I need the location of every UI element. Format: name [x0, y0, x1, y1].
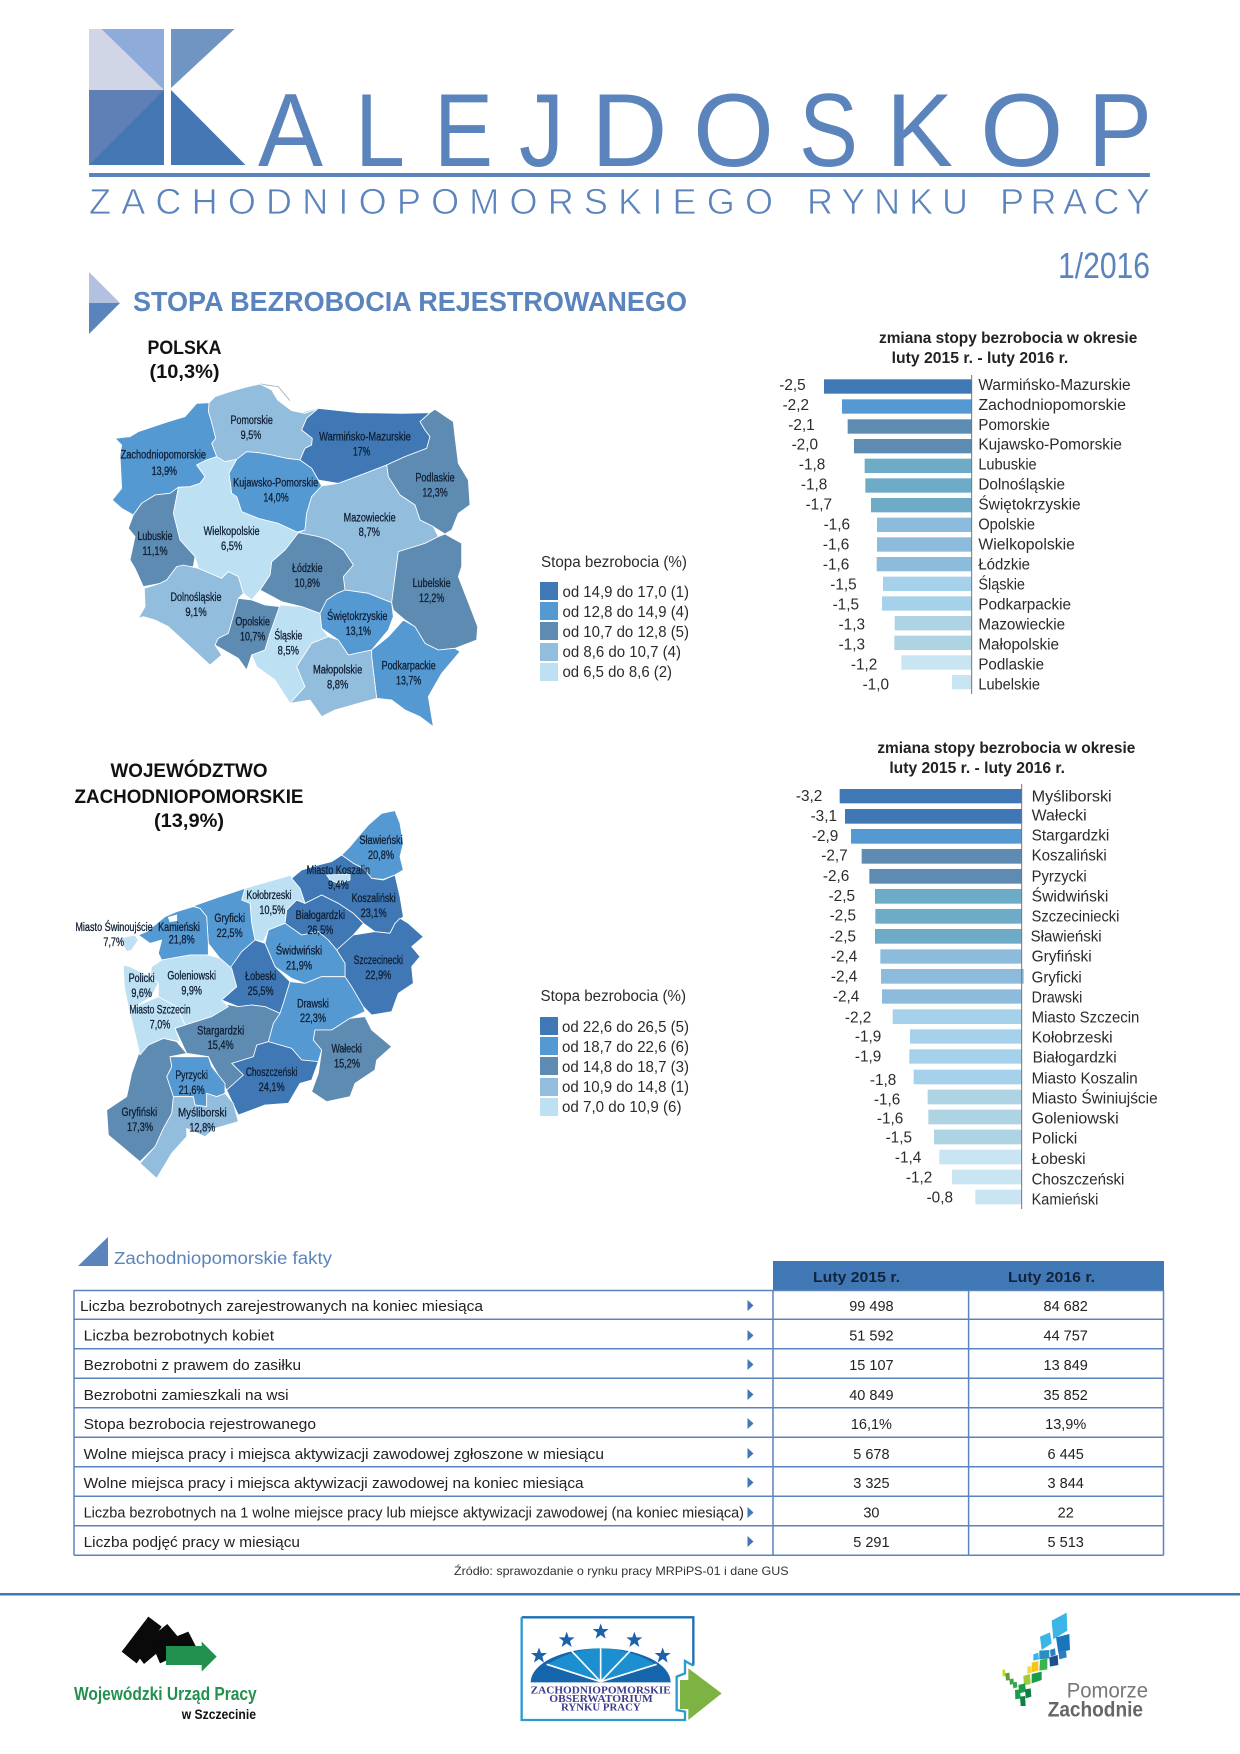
table header: Luty 2016 r.	[1008, 1270, 1095, 1286]
county labels: Kamieński	[158, 920, 200, 934]
logo: Wojewódzki Urząd Pracy: w Szczecinie	[181, 1706, 256, 1722]
icon: mosaic check mark	[1002, 1613, 1070, 1706]
legend: Poland unemployment rate: Stopa bezrobocia (%)	[541, 554, 687, 571]
title: ALEJDOSKOP letters: L	[355, 73, 405, 189]
region labels: Śląskie	[274, 627, 302, 642]
bars and values: -1,5	[833, 597, 859, 614]
axis line	[970, 375, 973, 694]
bars and values: -1,6	[823, 537, 849, 554]
row: jobs taken up: 5 513	[1048, 1535, 1084, 1551]
county labels: 23,1%	[361, 906, 387, 920]
heading: Polska	[148, 337, 222, 383]
bar chart: change by voivodeship	[779, 330, 1137, 694]
title: ALEJDOSKOP letters: P	[1088, 73, 1152, 189]
title rule	[89, 173, 1150, 177]
bars and values: Goleniowski	[1032, 1110, 1119, 1127]
region labels: Zachodniopomorskie	[121, 447, 206, 461]
bars and values: -1,6	[874, 1091, 900, 1108]
bars and values: Śląskie	[978, 576, 1025, 594]
bars and values: -2,0	[792, 437, 818, 454]
bars and values: Lubuskie	[978, 457, 1037, 474]
legend: county unemployment rate: od 7,0 do 10,9 (6)	[562, 1099, 682, 1116]
bars and values: -2,4	[831, 969, 858, 986]
region labels: 6,5%	[221, 539, 242, 553]
bars and values: -0,8	[927, 1190, 953, 1207]
bars and values: Warmińsko-Mazurskie	[978, 377, 1131, 394]
county labels: Kołobrzeski	[246, 888, 291, 902]
region labels: 10,7%	[240, 630, 265, 644]
county labels: 7,0%	[150, 1017, 170, 1031]
bars and values: Myśliborski	[1032, 789, 1112, 806]
bars and values: Dolnośląskie	[978, 477, 1065, 494]
legend: county unemployment rate	[540, 988, 689, 1116]
county labels: Szczecinecki	[354, 953, 403, 967]
region labels: 9,5%	[241, 428, 261, 442]
title: ALEJDOSKOP letters: A	[258, 73, 324, 189]
logo text: RYNKU PRACY	[561, 1702, 641, 1714]
bars and values: Podkarpackie	[978, 597, 1071, 614]
county labels: Stargardzki	[197, 1023, 244, 1037]
bars and values: Kujawsko-Pomorskie	[978, 437, 1122, 454]
county labels: 15,4%	[208, 1038, 234, 1052]
county labels: 25,5%	[248, 984, 274, 998]
county labels: Goleniowski	[167, 968, 216, 982]
county labels: Miasto Świnoujście	[75, 919, 153, 934]
row: registered unemployed: 99 498	[849, 1299, 894, 1315]
regions	[112, 384, 478, 727]
row: unemployed per vacancy	[84, 1506, 1074, 1522]
icon: observatory emblem	[522, 1617, 722, 1720]
bars and values: Miasto Koszalin	[1032, 1070, 1138, 1087]
row: registered unemployed	[80, 1299, 1088, 1315]
icon: triangle	[78, 1237, 108, 1266]
row: unemployed per vacancy: 22	[1058, 1506, 1074, 1522]
logo text: Wojewódzki Urząd Pracy	[74, 1684, 257, 1704]
legend: Poland unemployment rate	[540, 554, 689, 681]
logo text: Pomorze	[1067, 1680, 1148, 1703]
bars and values: -2,5	[829, 888, 855, 905]
row: vacancies reported: 6 445	[1048, 1447, 1084, 1463]
row: vacancies reported	[84, 1447, 1084, 1463]
map: Poland voivodeships	[112, 384, 478, 727]
bars and values: Stargardzki	[1032, 828, 1109, 845]
region labels: Łódzkie	[292, 561, 323, 575]
bars and values: Łódzkie	[978, 557, 1030, 574]
table header: Luty 2015 r.	[813, 1270, 900, 1286]
county labels: Choszczeński	[246, 1065, 297, 1079]
county labels: Myśliborski	[178, 1106, 227, 1120]
bars and values: -2,2	[783, 397, 809, 414]
bars and values: Świdwiński	[1032, 888, 1108, 906]
region labels: Podlaskie	[415, 470, 455, 484]
row: registered unemployment rate: 13,9%	[1045, 1417, 1086, 1433]
heading: Polska: (10,3%)	[150, 361, 220, 383]
icon: heading triangles	[89, 272, 120, 334]
county labels: Sławieński	[359, 833, 403, 847]
row: vacancies reported: 5 678	[853, 1447, 890, 1463]
legend: county unemployment rate: Stopa bezrobocia (%)	[540, 988, 686, 1005]
row: with benefit rights: 13 849	[1044, 1358, 1088, 1374]
region labels: 12,2%	[419, 591, 444, 605]
region labels: 10,8%	[295, 576, 320, 590]
county labels: Wałecki	[331, 1041, 362, 1055]
county labels: 21,9%	[286, 959, 312, 973]
region labels	[121, 413, 455, 691]
bars and values: -2,5	[830, 929, 856, 946]
row: registered unemployment rate: Stopa bezrobocia rejestrowanego	[84, 1417, 316, 1433]
county labels: 7,7%	[103, 935, 124, 949]
title: ALEJDOSKOP letters: S	[799, 73, 858, 189]
county labels: 17,3%	[127, 1120, 153, 1134]
bars and values: Choszczeński	[1032, 1171, 1124, 1188]
title: ALEJDOSKOP letters	[258, 73, 1152, 189]
bars and values: Policki	[1032, 1130, 1077, 1147]
region labels: Świętokrzyskie	[327, 608, 388, 623]
county labels: Białogardzki	[296, 908, 345, 922]
region labels: 14,0%	[263, 490, 289, 504]
bars and values: -3,2	[796, 788, 822, 805]
region labels: 13,7%	[396, 673, 421, 687]
county labels: 26,5%	[307, 923, 333, 937]
legend: county unemployment rate: od 10,9 do 14,8 (1)	[562, 1079, 689, 1096]
bars and values: Małopolskie	[978, 637, 1059, 654]
logo: Pomorze Zachodnie	[1002, 1613, 1148, 1722]
heading: Województwo zachodniopomorskie: WOJEWÓDZTWO	[110, 760, 268, 782]
region labels: 8,7%	[359, 525, 380, 539]
county labels: 22,3%	[300, 1011, 326, 1025]
bars and values: -2,6	[823, 868, 849, 885]
county labels: 21,6%	[179, 1083, 205, 1097]
county labels	[75, 833, 403, 1135]
bars and values: -1,9	[855, 1029, 881, 1046]
title: ALEJDOSKOP letters: J	[519, 73, 564, 189]
bars and values: Podlaskie	[978, 657, 1044, 674]
icon: black cards with green arrow	[122, 1617, 217, 1672]
chart title	[877, 740, 1135, 777]
bars and values: -1,3	[839, 617, 865, 634]
row: living in rural areas: 40 849	[849, 1388, 894, 1404]
region labels: Podkarpackie	[382, 658, 436, 672]
legend: county unemployment rate: od 18,7 do 22,6 (6)	[562, 1039, 689, 1056]
legend: Poland unemployment rate: od 8,6 do 10,7 (4)	[562, 644, 681, 661]
row: unemployed women: Liczba bezrobotnych kobiet	[84, 1328, 274, 1344]
region labels: Opolskie	[235, 615, 270, 629]
chart title: luty 2015 r. - luty 2016 r.	[889, 760, 1065, 777]
bars and values: Białogardzki	[1033, 1050, 1117, 1067]
icon: kaleidoscope K tiles	[89, 29, 246, 165]
bars and values: -2,9	[812, 828, 838, 845]
region labels: 12,3%	[422, 485, 448, 499]
bars and values: Świętokrzyskie	[978, 496, 1081, 514]
logo: Wojewódzki Urząd Pracy	[74, 1617, 257, 1722]
legend: county unemployment rate: od 22,6 do 26,5 (5)	[562, 1019, 689, 1036]
bars and values: Pomorskie	[978, 417, 1050, 434]
region labels: Lubelskie	[413, 576, 451, 590]
bars and values: -1,9	[855, 1049, 881, 1066]
bars and values: -3,1	[811, 808, 837, 825]
title: ALEJDOSKOP letters: O	[980, 73, 1064, 189]
county labels: Koszaliński	[352, 891, 396, 905]
row: unemployed women	[84, 1328, 1088, 1344]
bars and values: -1,2	[851, 657, 877, 674]
county labels: 15,2%	[334, 1056, 360, 1070]
region labels: 9,1%	[185, 605, 207, 619]
county labels: 22,5%	[217, 926, 243, 940]
row: vacancies at month end	[84, 1476, 1084, 1492]
bars and values: Łobeski	[1032, 1151, 1086, 1168]
heading: Polska: POLSKA	[148, 337, 222, 359]
bars and values: -2,2	[845, 1009, 871, 1026]
logo: Pomorze Zachodnie: Zachodnie	[1048, 1699, 1143, 1722]
bars and values: Drawski	[1032, 990, 1082, 1007]
bars and values: -1,6	[824, 517, 850, 534]
row: registered unemployed: 84 682	[1044, 1299, 1088, 1315]
county labels: Policki	[129, 971, 155, 985]
county labels: 21,8%	[169, 932, 195, 946]
bars and values: -1,6	[877, 1110, 903, 1127]
row: jobs taken up	[84, 1535, 1084, 1551]
legend: county unemployment rate: od 14,8 do 18,7 (3)	[562, 1059, 689, 1076]
logo text: ZACHODNIOPOMORSKIE	[531, 1684, 671, 1696]
county labels: 9,6%	[131, 986, 152, 1000]
region labels: 8,5%	[278, 643, 299, 657]
region labels: Warmińsko-Mazurskie	[319, 430, 411, 444]
row: vacancies reported: Wolne miejsca pracy i miejsca aktywizacji zawodowej zgłoszone w miesiącu	[84, 1447, 604, 1463]
bars and values: -1,8	[870, 1072, 896, 1089]
bars and values: Sławieński	[1031, 929, 1102, 946]
bars and values: Zachodniopomorskie	[978, 397, 1126, 414]
region labels: Kujawsko-Pomorskie	[233, 476, 318, 490]
row: unemployed per vacancy: Liczba bezrobotnych na 1 wolne miejsce pracy lub miejsce aktywizacji zawodowej (na koniec miesiąca)	[84, 1506, 744, 1522]
county labels: Pyrzycki	[175, 1068, 208, 1082]
section heading with triangle icon	[89, 272, 687, 334]
bars and values: Szczeciniecki	[1032, 909, 1119, 926]
county labels: 9,4%	[328, 878, 349, 892]
region labels: Małopolskie	[313, 662, 362, 676]
bars and values: Mazowieckie	[978, 617, 1065, 634]
facts heading with triangle icon	[78, 1237, 332, 1268]
masthead: Kalejdoskop logo and title	[89, 29, 1152, 222]
bars and values: Kamieński	[1032, 1191, 1098, 1208]
region labels: 17%	[353, 445, 370, 459]
logo text	[531, 1684, 671, 1714]
bars and values: Wałecki	[1032, 808, 1087, 825]
bars and values: -1,5	[830, 577, 857, 594]
row: unemployed women: 44 757	[1044, 1328, 1088, 1344]
chart title: luty 2015 r. - luty 2016 r.	[892, 350, 1068, 367]
row: living in rural areas: Bezrobotni zamieszkali na wsi	[84, 1388, 289, 1404]
row: unemployed per vacancy: 30	[863, 1506, 879, 1522]
bars and values	[779, 377, 1131, 694]
title: ALEJDOSKOP letters: D	[591, 73, 668, 189]
bars and values: Kołobrzeski	[1032, 1029, 1113, 1046]
bars and values: Lubelskie	[978, 677, 1040, 694]
row: with benefit rights: Bezrobotni z prawem do zasiłku	[84, 1358, 301, 1374]
county labels: 12,8%	[189, 1121, 215, 1135]
subtitle: RYNKU	[807, 181, 968, 222]
row: vacancies at month end: 3 325	[853, 1476, 890, 1492]
bars and values	[796, 788, 1158, 1208]
row: registered unemployed: Liczba bezrobotnych zarejestrowanych na koniec miesiąca	[80, 1299, 484, 1315]
region labels: Lubuskie	[137, 529, 173, 543]
subtitle	[89, 181, 1150, 222]
chart title	[879, 330, 1137, 367]
county labels: 22,9%	[365, 968, 391, 982]
footer rule	[0, 1593, 1240, 1596]
row: living in rural areas	[84, 1388, 1088, 1404]
row: with benefit rights	[84, 1358, 1088, 1374]
heading: Województwo zachodniopomorskie	[74, 760, 304, 832]
bars and values: -1,7	[806, 497, 832, 514]
county labels: Gryfiński	[121, 1105, 157, 1119]
county labels: Łobeski	[245, 969, 276, 983]
table header	[773, 1261, 1164, 1291]
axis line	[1020, 784, 1023, 1209]
region labels: Wielkopolskie	[204, 524, 260, 538]
facts heading text: Zachodniopomorskie fakty	[114, 1248, 332, 1268]
bars and values: Miasto Świniujście	[1032, 1089, 1158, 1107]
source note: Źródło: sprawozdanie o rynku pracy MRPiPS-01 i dane GUS	[454, 1563, 789, 1578]
region labels: Mazowieckie	[344, 510, 396, 524]
regions	[107, 811, 423, 1178]
legend: Poland unemployment rate: od 10,7 do 12,8 (5)	[562, 624, 689, 641]
bars and values: Opolskie	[978, 517, 1035, 534]
row: unemployed women: 51 592	[849, 1328, 894, 1344]
county labels: Drawski	[297, 996, 329, 1010]
bars and values: -2,5	[830, 908, 856, 925]
region labels: Pomorskie	[230, 413, 273, 427]
region labels: 13,9%	[152, 464, 177, 478]
county labels: Gryficki	[214, 911, 245, 925]
county labels: 10,5%	[259, 903, 285, 917]
row: living in rural areas: 35 852	[1044, 1388, 1088, 1404]
chart title: zmiana stopy bezrobocia w okresie	[879, 330, 1137, 347]
heading: Województwo zachodniopomorskie: (13,9%)	[154, 811, 224, 832]
legend: Poland unemployment rate: od 12,8 do 14,9 (4)	[562, 604, 689, 621]
legend: Poland unemployment rate: od 6,5 do 8,6 (2)	[562, 664, 672, 681]
bar chart: change by county	[796, 740, 1158, 1209]
issue number: 1/2016	[1058, 245, 1150, 286]
heading text: STOPA BEZROBOCIA REJESTROWANEGO	[133, 286, 687, 317]
bars and values: -1,6	[823, 557, 849, 574]
title: ALEJDOSKOP letters: K	[886, 73, 953, 189]
row: vacancies at month end: Wolne miejsca pracy i miejsca aktywizacji zawodowej na koniec miesiąca	[84, 1476, 585, 1492]
bars and values: -1,8	[799, 457, 825, 474]
row: vacancies at month end: 3 844	[1048, 1476, 1084, 1492]
map: West Pomeranian counties	[75, 811, 423, 1178]
subtitle: ZACHODNIOPOMORSKIEGO	[89, 181, 773, 222]
row: with benefit rights: 15 107	[849, 1358, 894, 1374]
bars and values: Koszaliński	[1032, 848, 1107, 865]
row: registered unemployment rate: 16,1%	[851, 1417, 892, 1433]
bars and values: -2,1	[788, 417, 815, 434]
bars and values: -2,4	[833, 989, 860, 1006]
chart title: zmiana stopy bezrobocia w okresie	[877, 740, 1135, 757]
bars and values: -2,7	[821, 848, 848, 865]
table: facts	[74, 1261, 1164, 1555]
bars and values: Pyrzycki	[1032, 869, 1087, 886]
county labels: 9,9%	[181, 983, 202, 997]
bars and values: -2,4	[831, 949, 858, 966]
bars and values: -1,3	[839, 637, 865, 654]
region labels: 8,8%	[327, 677, 348, 691]
heading: Województwo zachodniopomorskie: ZACHODNIOPOMORSKIE	[74, 787, 304, 808]
table grid	[74, 1290, 1164, 1555]
county labels: Miasto Koszalin	[307, 863, 370, 877]
row: jobs taken up: 5 291	[853, 1535, 890, 1551]
county labels: Świdwiński	[276, 943, 322, 958]
row: registered unemployment rate	[84, 1417, 1086, 1433]
region labels: Dolnośląskie	[170, 590, 222, 604]
county labels: 24,1%	[259, 1080, 285, 1094]
bars and values: -1,4	[895, 1150, 922, 1167]
bars and values: -2,5	[779, 377, 806, 394]
bars and values: -1,8	[801, 477, 827, 494]
logo text: OBSERWATORIUM	[549, 1693, 653, 1705]
bars and values: Miasto Szczecin	[1032, 1010, 1139, 1027]
region labels: 13,1%	[346, 624, 371, 638]
county labels: Miasto Szczecin	[129, 1002, 191, 1016]
bars and values: -1,0	[863, 677, 889, 694]
legend: Poland unemployment rate: od 14,9 do 17,0 (1)	[562, 584, 689, 601]
row: jobs taken up: Liczba podjęć pracy w miesiącu	[84, 1535, 300, 1551]
region labels: 11,1%	[142, 544, 168, 558]
county labels: 20,8%	[368, 848, 394, 862]
logo: Zachodniopomorskie Obserwatorium Rynku Pracy	[522, 1617, 722, 1720]
bars and values: -1,5	[886, 1129, 912, 1146]
title: ALEJDOSKOP letters: E	[434, 73, 493, 189]
bars and values: Gryfiński	[1032, 949, 1092, 966]
bars and values: Gryficki	[1032, 969, 1082, 986]
bars and values: Wielkopolskie	[978, 537, 1075, 554]
bars and values: -1,2	[906, 1170, 932, 1187]
subtitle: PRACY	[1000, 181, 1150, 222]
title: ALEJDOSKOP letters: O	[693, 73, 774, 189]
